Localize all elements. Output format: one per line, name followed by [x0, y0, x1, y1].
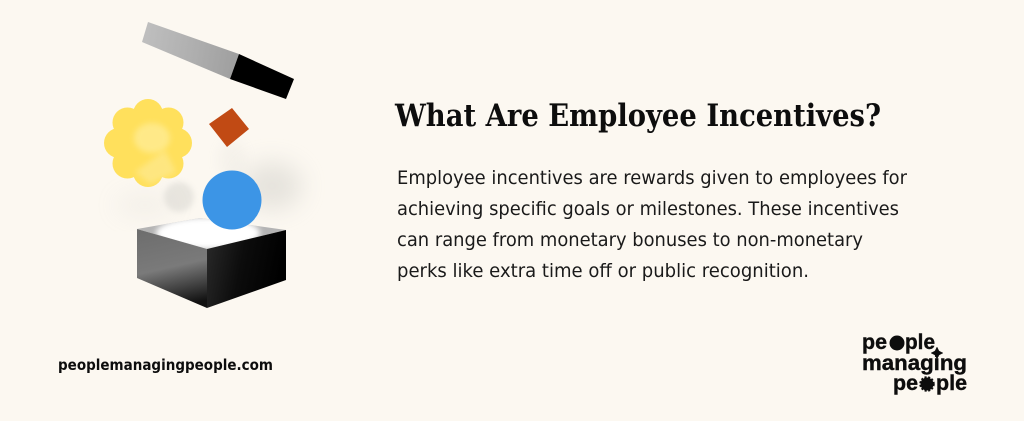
body text	[397, 167, 907, 282]
logo: pe	[893, 372, 918, 395]
heading: What Are Employee Incentives?	[394, 98, 881, 134]
logo: pe	[862, 331, 887, 354]
icon: box lid	[142, 22, 294, 99]
smoke glow	[115, 140, 302, 217]
logo: managing	[862, 352, 967, 375]
icon: yellow scalloped badge	[104, 99, 192, 187]
icon: blue circle	[202, 170, 262, 230]
logo: ple	[936, 372, 967, 395]
logo	[862, 331, 967, 395]
infographic canvas	[59, 22, 967, 395]
logo: ple	[905, 331, 935, 354]
body text: achieving specific goals or milestones. These incentives	[397, 198, 899, 220]
body text: perks like extra time off or public recognition.	[397, 260, 809, 282]
body text: Employee incentives are rewards given to employees for	[397, 167, 907, 189]
website url: peoplemanagingpeople.com	[58, 356, 273, 374]
body text: can range from monetary bonuses to non-monetary	[397, 229, 863, 251]
icon: orange diamond	[209, 108, 249, 147]
icon: box body	[137, 217, 286, 308]
illustration: open gift box	[104, 22, 302, 308]
